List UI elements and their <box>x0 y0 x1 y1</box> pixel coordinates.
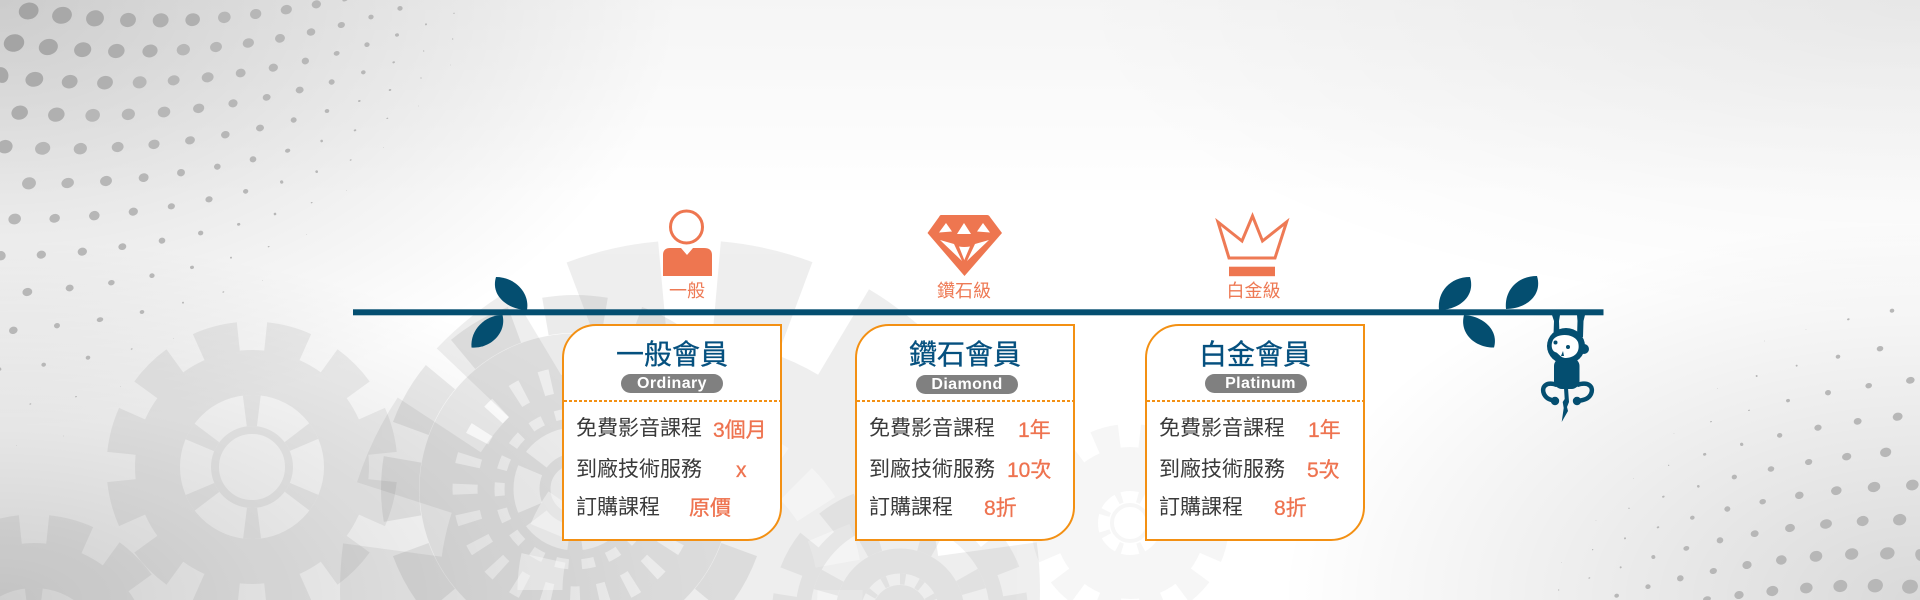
large light gear <box>390 290 990 600</box>
badge <box>916 375 1018 394</box>
row label: course order: 訂購課程 <box>869 496 953 519</box>
halftone dots top left <box>0 0 455 446</box>
icon: crown <box>1218 216 1287 276</box>
value: 原價 <box>689 497 731 520</box>
panel: diamond member <box>855 324 1075 541</box>
value: 8折 <box>1274 497 1307 520</box>
gears <box>0 290 1217 600</box>
icon: monkey <box>1543 315 1592 422</box>
medium left gear <box>121 336 383 598</box>
icon: person <box>663 211 712 276</box>
value: 1年 <box>1308 418 1341 442</box>
value: 3個月 <box>713 418 767 442</box>
value: 5次 <box>1307 458 1340 482</box>
icon: diamond <box>928 215 1002 276</box>
badge <box>621 374 723 393</box>
row label: video courses: 免費影音課程 <box>576 417 702 440</box>
row label: on-site service: 到廠技術服務 <box>576 458 702 481</box>
halftone dots bottom right <box>1558 308 1920 600</box>
badge: Platinum <box>1225 375 1296 392</box>
right leaves <box>1439 276 1538 348</box>
left leaves <box>471 277 527 348</box>
central detailed gear <box>400 314 750 600</box>
value: 8折 <box>984 497 1017 520</box>
value: 10次 <box>1007 458 1051 482</box>
badge: Ordinary <box>637 375 707 392</box>
value: 1年 <box>1018 418 1051 442</box>
branch <box>353 309 1604 315</box>
tier label: ordinary: 一般 <box>669 281 705 301</box>
panel: platinum member <box>1145 324 1365 541</box>
row label: course order: 訂購課程 <box>576 496 660 519</box>
heading: 一般會員 <box>616 339 728 370</box>
row label: on-site service: 到廠技術服務 <box>1159 458 1285 481</box>
value: x <box>736 458 746 482</box>
badge <box>1205 374 1307 393</box>
tier label: diamond: 鑽石級 <box>937 281 991 301</box>
bottom left gear <box>0 529 165 600</box>
row label: on-site service: 到廠技術服務 <box>869 458 995 481</box>
light windows of the large gear <box>540 440 840 600</box>
heading: 鑽石會員 <box>909 339 1021 370</box>
heading: 白金會員 <box>1199 339 1311 370</box>
badge: Diamond <box>931 376 1003 393</box>
row label: course order: 訂購課程 <box>1159 496 1243 519</box>
row label: video courses: 免費影音課程 <box>869 417 995 440</box>
right small gear <box>1043 436 1217 600</box>
lower centre gear <box>784 497 1016 600</box>
panel: ordinary member <box>562 324 782 541</box>
row label: video courses: 免費影音課程 <box>1159 417 1285 440</box>
tier label: platinum: 白金級 <box>1226 281 1280 301</box>
